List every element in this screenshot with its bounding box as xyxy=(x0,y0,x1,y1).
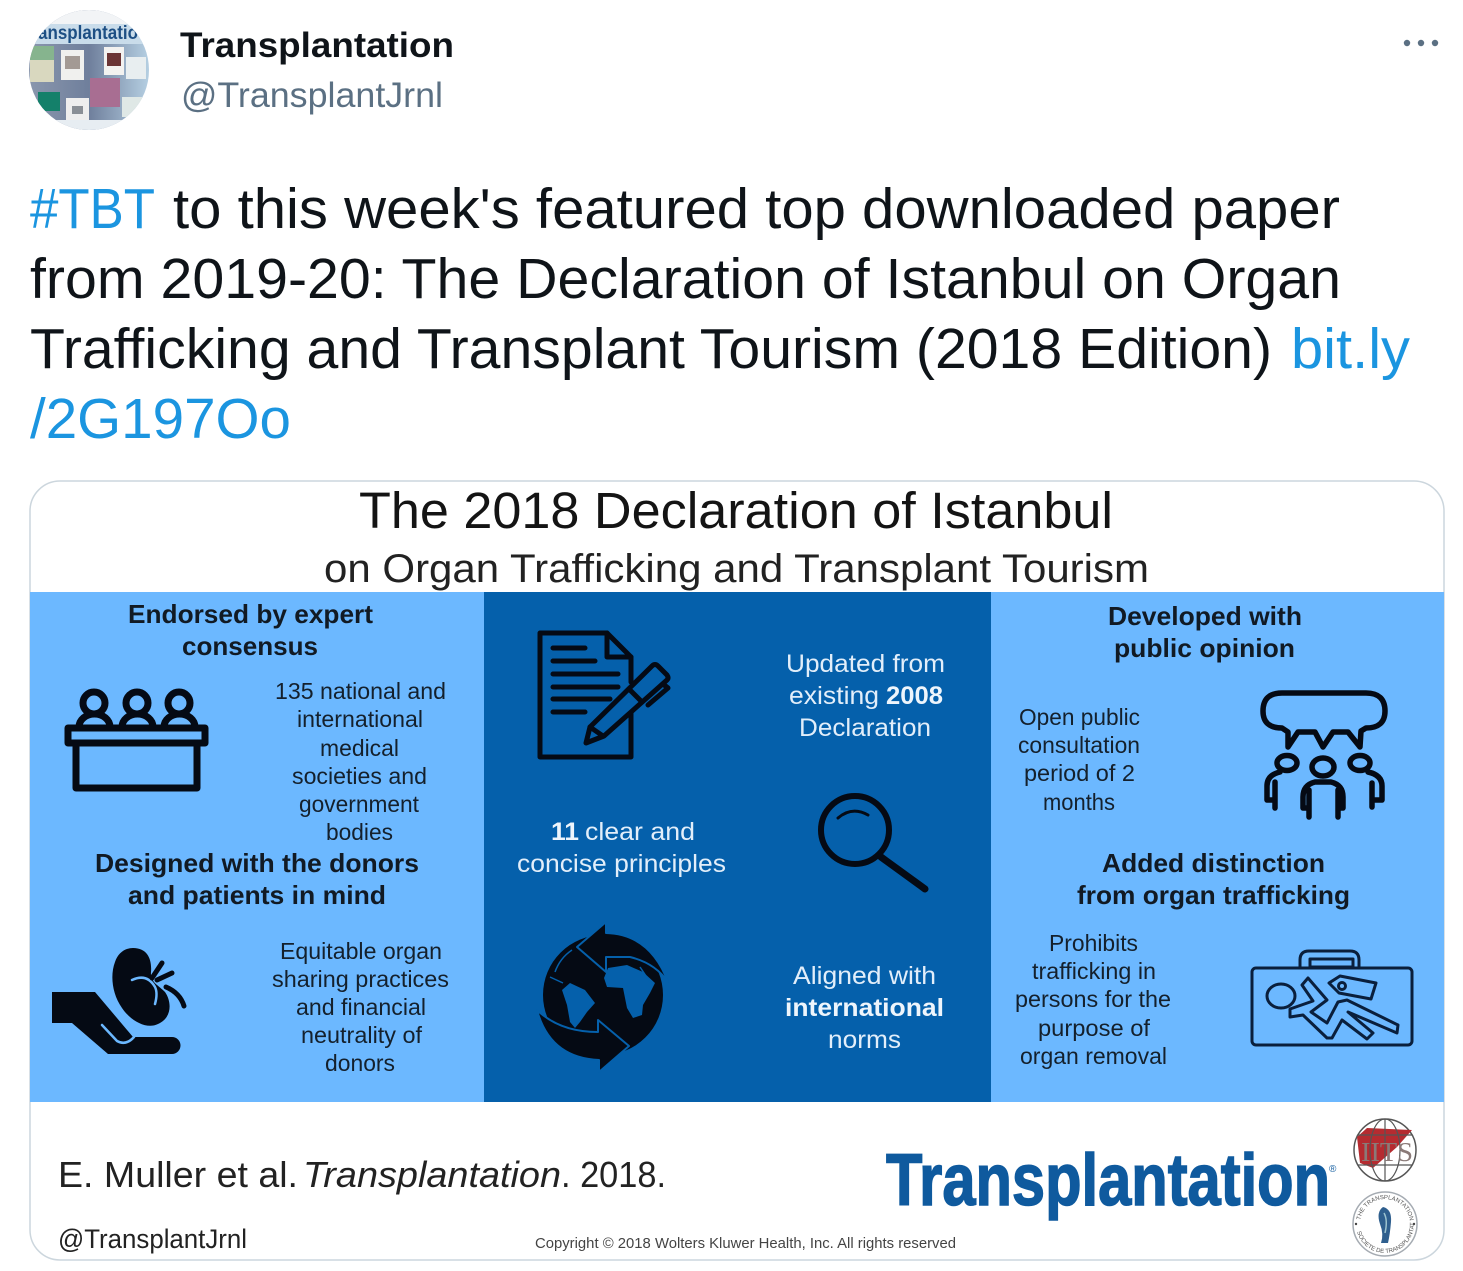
avatar: journal cover xyxy=(29,10,149,130)
tweet text: bit.ly xyxy=(1291,317,1411,381)
text: prohibits trafficking: Prohibits xyxy=(1049,930,1138,956)
text: 11 clear principles: clear and xyxy=(585,818,695,846)
text: open public consultation: period of 2 xyxy=(1024,760,1135,786)
tweet text: from 2019-20: The Declaration of Istanbul on Organ xyxy=(30,247,1341,311)
logo: The Transplantation Society seal: SOCIETE DE TRANSPLANTATION xyxy=(1358,1222,1414,1253)
heading: developed with public opinion xyxy=(1108,601,1302,663)
text: equitable organ sharing: donors xyxy=(325,1050,395,1076)
text: equitable organ sharing: Equitable organ xyxy=(280,938,442,964)
heading: designed with donors and patients: and patients in mind xyxy=(128,880,386,910)
text: updated from 2008: Updated from xyxy=(786,650,945,678)
icon: magnifying glass xyxy=(821,796,925,889)
icon: suitcase with figure xyxy=(1252,951,1412,1045)
heading: added distinction: Added distinction xyxy=(1102,848,1325,878)
text: 135 national: 135 national and xyxy=(275,678,446,704)
icon: hand holding kidney xyxy=(52,948,184,1054)
text: 135 national: medical xyxy=(320,735,399,761)
text: prohibits trafficking xyxy=(1015,930,1171,1069)
avatar: journal cover: ansplantatio xyxy=(38,23,138,44)
icon: globe with circular arrows xyxy=(537,922,668,1072)
icon: people with speech bubble xyxy=(1263,693,1385,817)
text: 11 clear principles xyxy=(517,818,726,878)
infographic card xyxy=(29,480,1445,1261)
heading: developed with public opinion: public opinion xyxy=(1114,633,1295,663)
text: updated from 2008: 2008 xyxy=(886,682,943,710)
title: The 2018 Declaration of Istanbul xyxy=(359,482,1113,539)
text: open public consultation: consultation xyxy=(1018,732,1140,758)
heading: added distinction: from organ trafficking xyxy=(1077,880,1350,910)
heading: designed with donors and patients xyxy=(95,848,419,910)
citation: . 2018. xyxy=(561,1154,666,1195)
account handle: @TransplantJrnl xyxy=(181,76,443,115)
text: aligned with international norms xyxy=(785,962,944,1054)
icon: document and pen xyxy=(540,633,668,757)
icon: more menu xyxy=(1404,40,1438,46)
logo: The Transplantation Society seal: THE TRANSPLANTATION SOCIETY xyxy=(1356,1194,1414,1220)
account name: Transplantation xyxy=(180,26,454,65)
tweet text: /2G197Oo xyxy=(30,387,291,451)
text: prohibits trafficking: trafficking in xyxy=(1032,958,1156,984)
citation: Transplantation xyxy=(303,1154,561,1195)
text: open public consultation xyxy=(1018,704,1140,815)
subtitle: on Organ Trafficking and Transplant Tourism xyxy=(324,547,1149,591)
text: 11 clear principles: concise principles xyxy=(517,850,726,878)
text: equitable organ sharing: neutrality of xyxy=(301,1022,423,1048)
logo: IITS globe xyxy=(1354,1119,1416,1181)
text: open public consultation: Open public xyxy=(1019,704,1140,730)
text: equitable organ sharing: sharing practices xyxy=(272,966,449,992)
text: equitable organ sharing: and financial xyxy=(296,994,426,1020)
text: aligned with international norms: norms xyxy=(828,1026,901,1054)
tweet text xyxy=(30,177,1411,451)
logo: IITS globe: IITS xyxy=(1361,1137,1413,1167)
panel: centre dark blue xyxy=(484,592,991,1102)
text: updated from 2008 xyxy=(786,650,945,742)
text: 135 national: international xyxy=(297,706,423,732)
citation xyxy=(58,1154,666,1195)
panel: left light blue xyxy=(30,592,484,1102)
logo: Transplantation wordmark: ® xyxy=(1329,1164,1337,1175)
heading: endorsed by expert consensus xyxy=(128,599,373,661)
journal handle: @TransplantJrnl xyxy=(58,1224,247,1254)
logo: Transplantation wordmark: Transplantation xyxy=(886,1140,1330,1221)
heading: designed with donors and patients: Designed with the donors xyxy=(95,848,419,878)
heading: added distinction xyxy=(1077,848,1350,910)
tweet text: #TBT xyxy=(30,177,155,241)
tweet text: Trafficking and Transplant Tourism (2018 Edition) xyxy=(30,317,1272,381)
panel: right light blue xyxy=(991,592,1444,1102)
heading: developed with public opinion: Developed with xyxy=(1108,601,1302,631)
text: aligned with international norms: Aligned with xyxy=(793,962,936,990)
icon: expert panel behind desk xyxy=(68,692,205,788)
text: 11 clear principles: 11 xyxy=(551,818,579,846)
text: aligned with international norms: international xyxy=(785,994,944,1022)
text: prohibits trafficking: persons for the xyxy=(1015,986,1171,1012)
text: 135 national: government xyxy=(299,791,420,817)
text: open public consultation: months xyxy=(1043,789,1115,815)
tweet text: to this week's featured top downloaded paper xyxy=(173,177,1340,241)
text: equitable organ sharing xyxy=(272,938,449,1076)
citation: E. Muller et al. xyxy=(58,1154,298,1195)
text: 135 national xyxy=(275,678,446,845)
heading: endorsed by expert consensus: consensus xyxy=(182,631,318,661)
text: 135 national: societies and xyxy=(292,763,427,789)
text: 135 national: bodies xyxy=(326,819,393,845)
text: prohibits trafficking: purpose of xyxy=(1038,1015,1151,1041)
text: prohibits trafficking: organ removal xyxy=(1020,1043,1167,1069)
copyright: Copyright © 2018 Wolters Kluwer Health, Inc. All rights reserved xyxy=(535,1235,956,1252)
tweet header xyxy=(29,10,454,130)
text: updated from 2008: Declaration xyxy=(799,714,931,742)
heading: endorsed by expert consensus: Endorsed by expert xyxy=(128,599,373,629)
text: updated from 2008: existing xyxy=(789,682,879,710)
